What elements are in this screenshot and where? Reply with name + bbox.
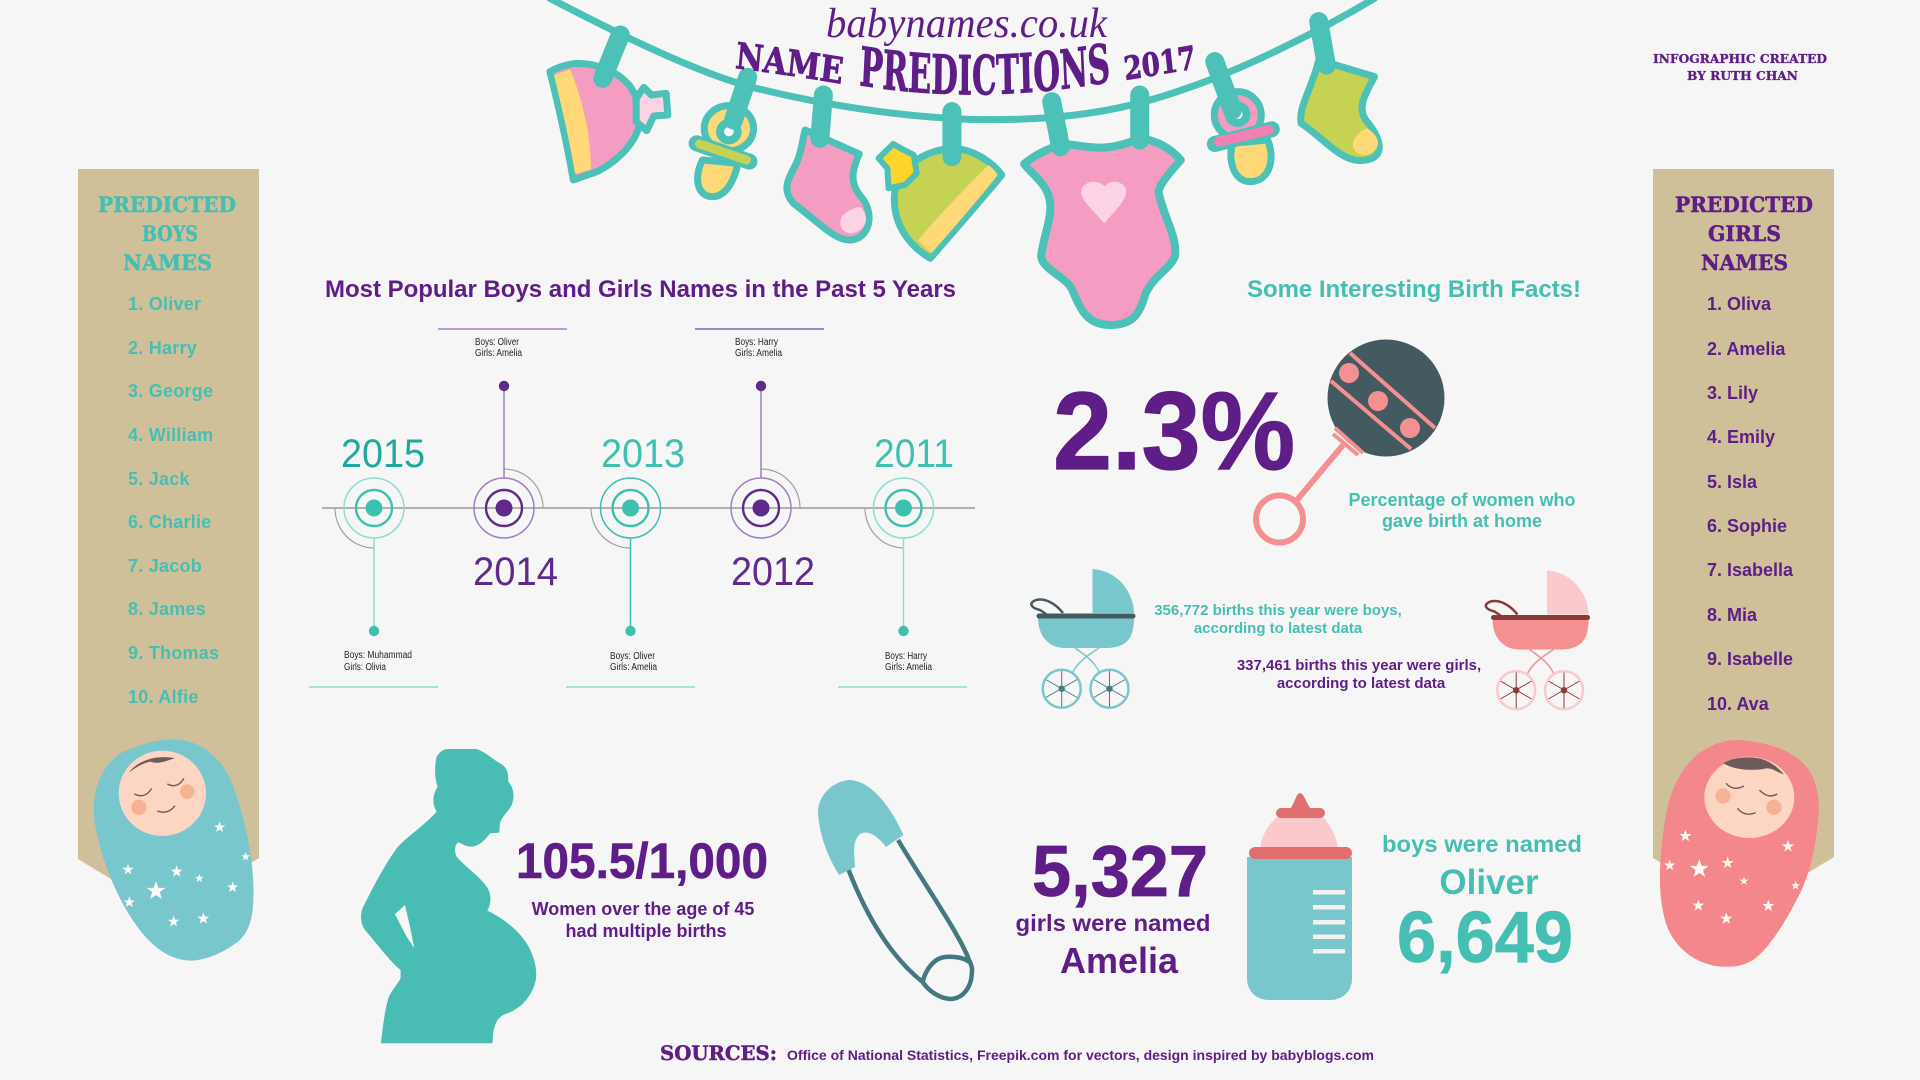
heading: predicted girls names: GIRLS	[1708, 221, 1781, 246]
node: 2012: 2012	[731, 550, 815, 594]
caption: multiple births: Women over the age of 45	[532, 899, 754, 919]
node: 2015	[309, 432, 438, 687]
list: girls names: 8. Mia	[1707, 605, 1758, 625]
panel: predicted boys names	[78, 169, 259, 961]
icon: rattle	[1256, 340, 1444, 542]
stat: boys named Oliver: 6,649	[1397, 898, 1573, 978]
node: 2012: Boys: Harry	[735, 337, 778, 348]
heading: predicted boys names: BOYS	[142, 221, 198, 246]
number: 2.3%: 2.3%	[1053, 370, 1295, 493]
list: girls names: 5. Isla	[1707, 472, 1758, 492]
list: boys names: 3. George	[128, 381, 213, 401]
list: girls names: 7. Isabella	[1707, 560, 1794, 580]
node: 2014: Boys: Oliver	[475, 337, 520, 348]
icon: pink pacifier	[1214, 62, 1272, 182]
node: 2012	[695, 329, 824, 594]
heading: predicted boys names: PREDICTED	[98, 192, 236, 217]
logo: babynames.co.uk: babynames.co.uk	[826, 1, 1108, 47]
garland: baby clothes on a line	[550, 0, 1379, 325]
stat: girls named Amelia: Amelia	[1060, 940, 1179, 981]
list: girls names: 2. Amelia	[1707, 339, 1786, 359]
sources	[660, 1041, 1374, 1065]
icon: pregnant woman silhouette	[361, 749, 536, 1043]
title: name predictions 2017	[736, 42, 1193, 96]
text: boys births: 356,772 births this year were boys,	[1154, 602, 1402, 619]
icon: yellow pacifier	[697, 77, 754, 197]
sources: Office of National Statistics, Freepik.com for vectors, design inspired by babyblogs.com	[787, 1047, 1374, 1063]
list: girls names: 3. Lily	[1707, 383, 1758, 403]
icon: pink hat	[550, 35, 668, 180]
node: 2011	[838, 432, 967, 687]
heading: predicted boys names	[98, 192, 236, 275]
title: name predictions 2017: NAME	[736, 42, 844, 84]
number: 105.5/1,000: 105.5/1,000	[516, 833, 768, 889]
node: 2015: Girls: Olivia	[344, 662, 386, 673]
stat: home births	[1053, 340, 1576, 542]
list: boys names: 7. Jacob	[128, 556, 202, 576]
heading: predicted girls names: PREDICTED	[1675, 192, 1813, 217]
node: 2014: Girls: Amelia	[475, 348, 522, 359]
list: girls names: 4. Emily	[1707, 427, 1775, 447]
node: 2015: Boys: Muhammad	[344, 650, 412, 661]
caption: multiple births	[532, 899, 754, 941]
caption: multiple births: had multiple births	[565, 921, 727, 941]
icon: green sock	[1301, 22, 1379, 161]
list: boys names: 5. Jack	[128, 469, 191, 489]
list: boys names: 2. Harry	[128, 338, 197, 358]
caption: home births: gave birth at home	[1382, 511, 1542, 531]
node: 2011: 2011	[874, 432, 954, 476]
text: girls births: according to latest data	[1277, 675, 1446, 692]
node: 2015: 2015	[341, 432, 425, 476]
caption: home births: Percentage of women who	[1348, 490, 1576, 510]
list: boys names: 9. Thomas	[128, 643, 219, 663]
node: 2012: Girls: Amelia	[735, 348, 782, 359]
list: girls names: 1. Oliva	[1707, 294, 1772, 314]
list: girls names: 9. Isabelle	[1707, 649, 1793, 669]
icon: pink onesie	[1024, 95, 1181, 325]
stat: boys named Oliver	[1382, 831, 1582, 978]
list: boys names: 6. Charlie	[128, 512, 212, 532]
list: boys names: 8. James	[128, 599, 206, 619]
axis	[322, 507, 975, 509]
icon: baby bottle	[1247, 793, 1352, 1000]
icon: pink pram	[1486, 570, 1588, 709]
heading: birth facts: Some Interesting Birth Facts!	[1247, 276, 1581, 303]
heading: timeline: Most Popular Boys and Girls Names in the Past 5 Years	[325, 276, 956, 303]
node: 2013: 2013	[601, 432, 685, 476]
list: girls names	[1707, 294, 1794, 714]
list: boys names: 4. William	[128, 425, 213, 445]
list: boys names: 1. Oliver	[128, 294, 201, 314]
text: boys births: according to latest data	[1194, 620, 1363, 637]
node: 2014	[438, 329, 567, 594]
credit: INFOGRAPHIC CREATED	[1653, 52, 1827, 66]
list: boys names	[128, 294, 219, 707]
stat: boys named Oliver: Oliver	[1439, 863, 1539, 902]
text: boys births	[1154, 602, 1402, 637]
ribbon: girls	[1653, 169, 1834, 912]
node: 2011: Boys: Harry	[885, 651, 927, 662]
list: boys names: 10. Alfie	[128, 687, 199, 707]
panel: predicted girls names	[1653, 169, 1834, 967]
rope	[550, 0, 1374, 120]
node: 2014: 2014	[473, 550, 558, 594]
node: 2011: Girls: Amelia	[885, 662, 932, 673]
sources: SOURCES:	[660, 1041, 777, 1065]
heading: predicted boys names: NAMES	[123, 250, 212, 275]
stat: boys named Oliver: boys were named	[1382, 831, 1582, 857]
title: name predictions 2017: 2017	[1124, 45, 1193, 80]
stat: girls named Amelia: girls were named	[1016, 910, 1210, 936]
chart: timeline of popular names	[309, 329, 975, 687]
text: girls births	[1237, 657, 1481, 692]
node: 2013	[566, 432, 695, 687]
text: girls births: 337,461 births this year were girls,	[1237, 657, 1481, 674]
icon: teal pram	[1031, 569, 1134, 708]
stat: births by gender	[1031, 569, 1588, 709]
icon: swaddled baby girl	[1660, 740, 1819, 967]
node: 2013: Boys: Oliver	[610, 651, 656, 662]
list: girls names: 6. Sophie	[1707, 516, 1787, 536]
stat: girls named Amelia	[1016, 832, 1210, 981]
heading: predicted girls names	[1675, 192, 1813, 275]
icon: safety pin	[818, 780, 972, 999]
icon: swaddled baby boy	[94, 739, 254, 961]
icon: green hat	[879, 112, 1002, 258]
stat: multiple births	[361, 749, 768, 1043]
caption: home births	[1348, 490, 1576, 531]
list: girls names: 10. Ava	[1707, 694, 1770, 714]
heading: predicted girls names: NAMES	[1701, 250, 1788, 275]
stat: girls named Amelia: 5,327	[1032, 832, 1208, 912]
title: name predictions 2017: PREDICTIONS	[860, 43, 1109, 96]
node: 2013: Girls: Amelia	[610, 662, 657, 673]
credit: BY RUTH CHAN	[1687, 69, 1798, 83]
icon: pink sock	[787, 95, 869, 240]
ribbon: boys	[78, 169, 259, 914]
credit	[1653, 52, 1827, 83]
